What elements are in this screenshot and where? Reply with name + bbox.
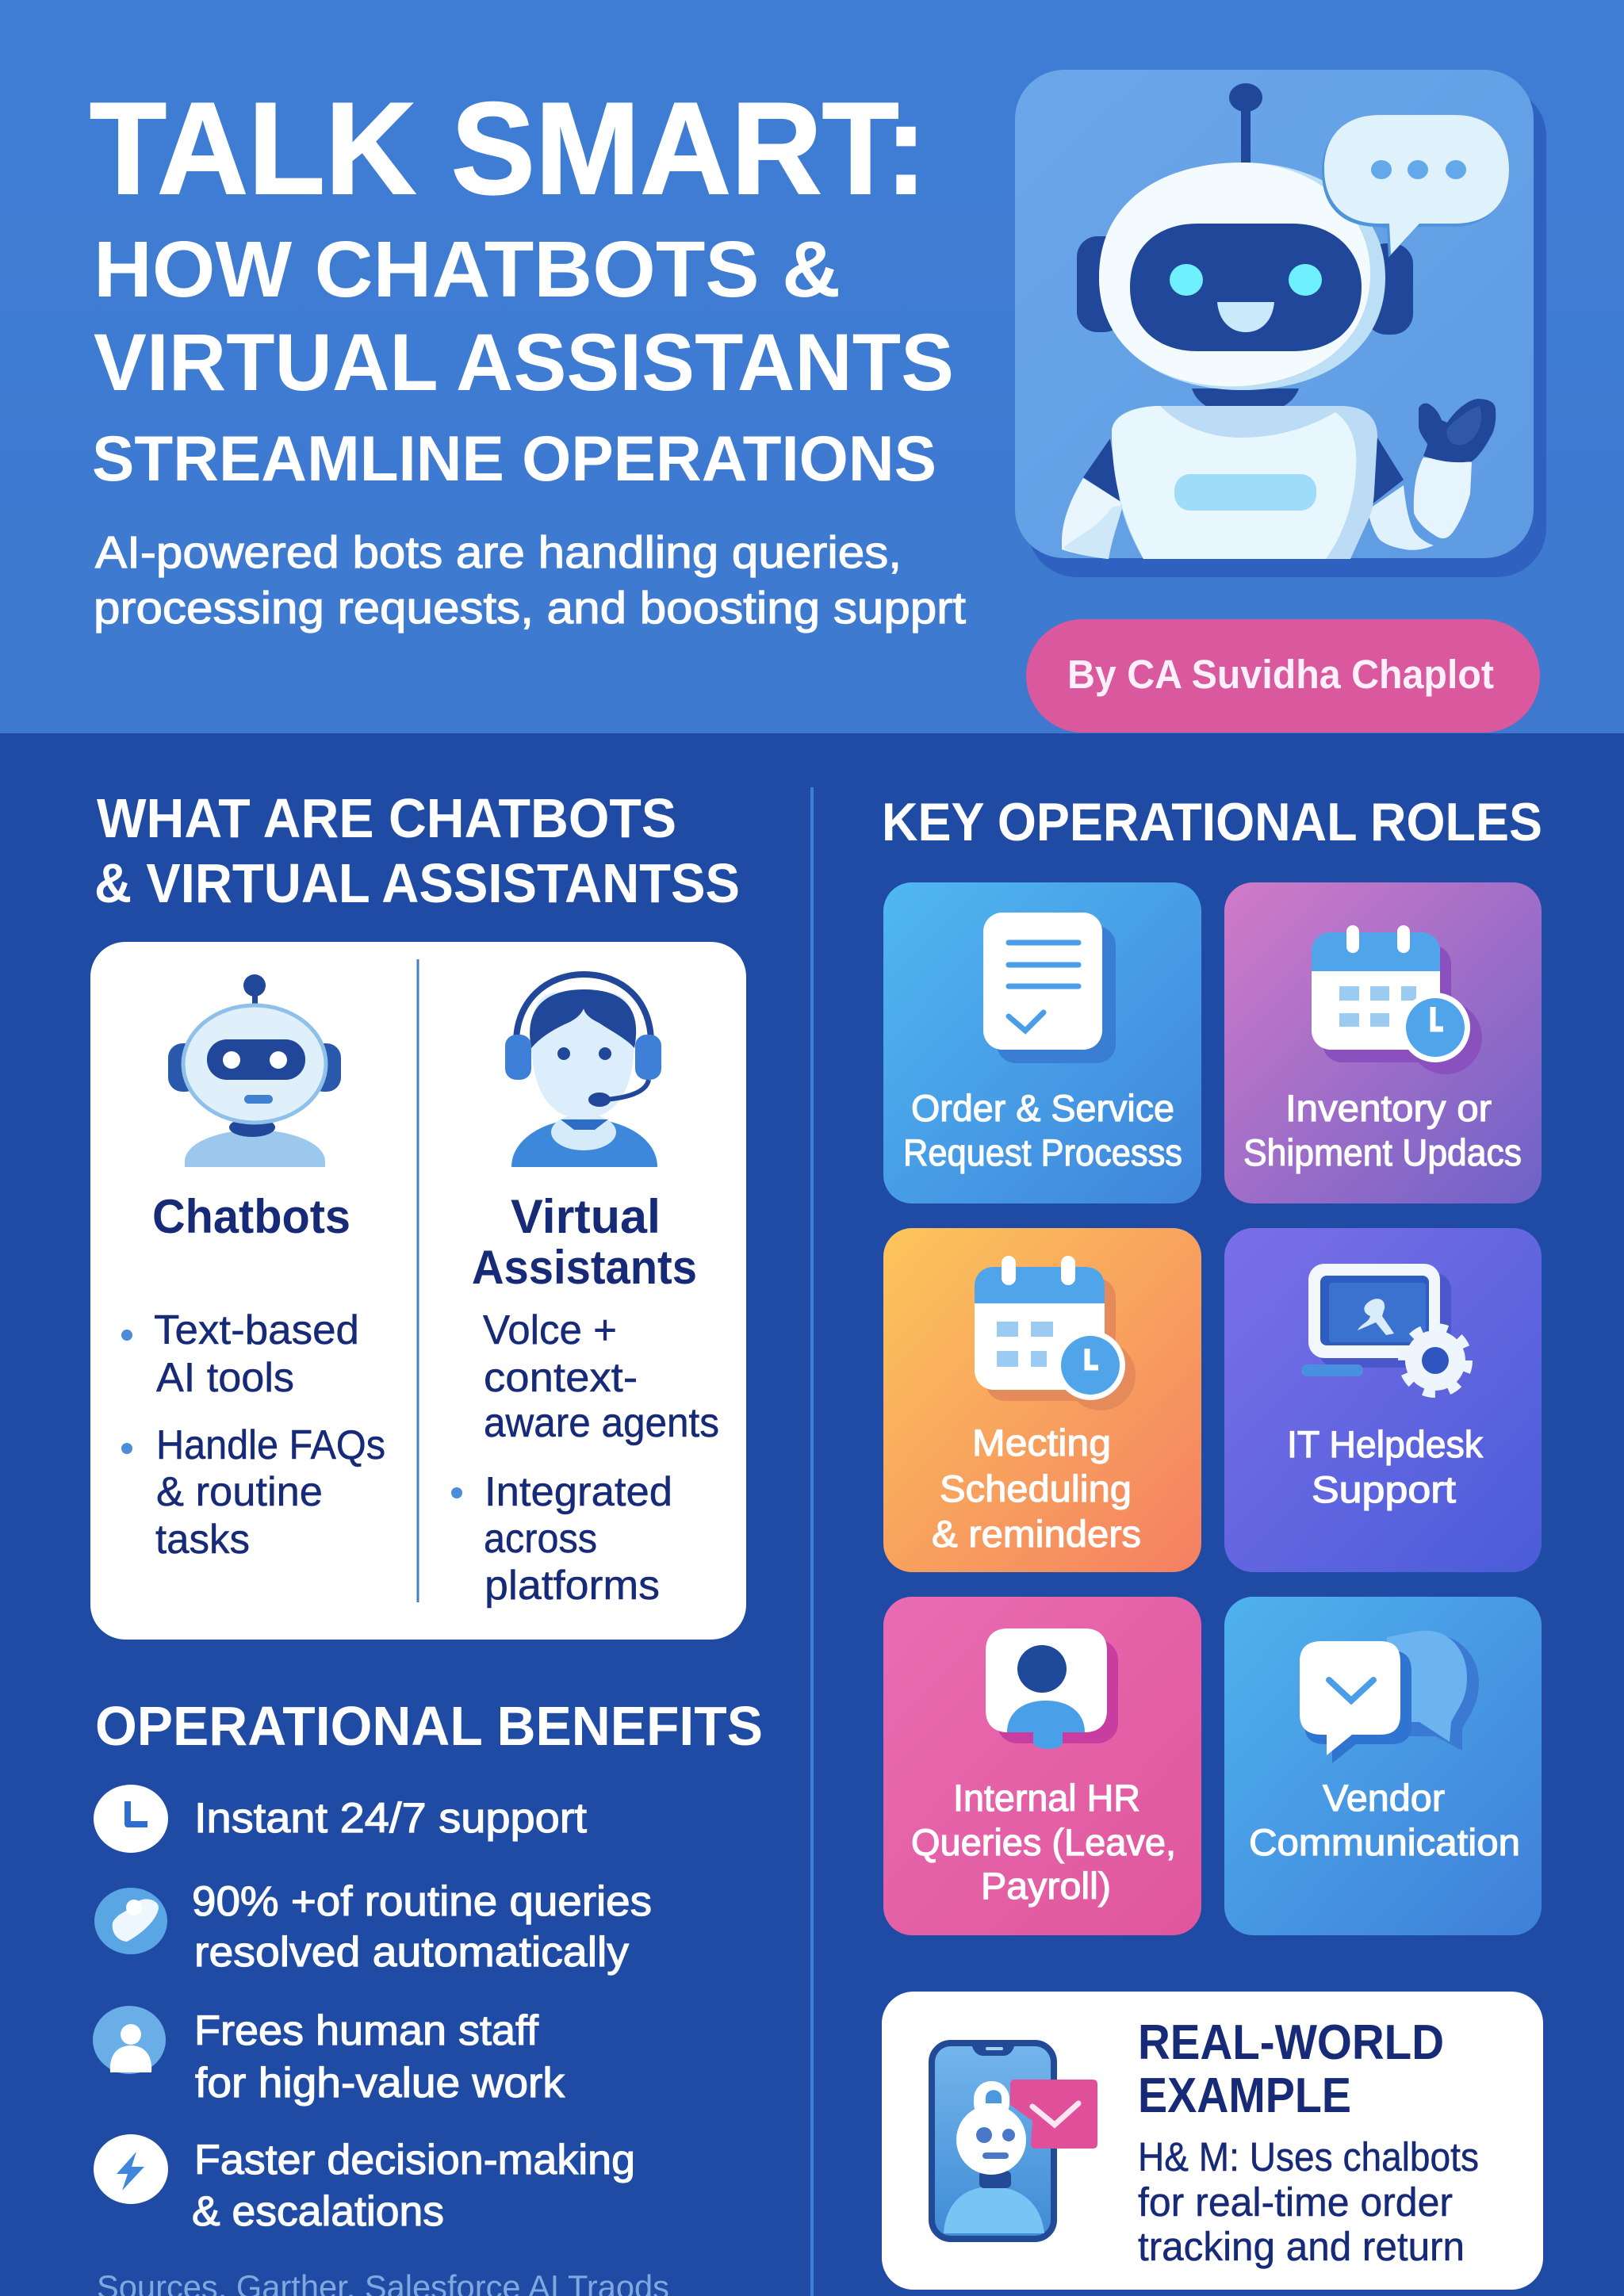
- card: inventory or shipment: Shipment Updacs: [1243, 1131, 1522, 1173]
- benefit: routine queries: 90% +of routine queries: [192, 1878, 652, 1925]
- card: meeting scheduling: Scheduling: [940, 1468, 1132, 1510]
- section heading: what are chatbots: [94, 787, 740, 914]
- robot ears: [1077, 236, 1413, 335]
- card: meeting scheduling: & reminders: [932, 1513, 1141, 1555]
- title: VIRTUAL ASSISTANTS: [94, 317, 954, 408]
- title: HOW CHATBOTS &: [94, 225, 841, 314]
- benefit: frees human staff: for high-value work: [195, 2060, 565, 2107]
- robot eyes: [1170, 264, 1322, 296]
- icon: person profile: [986, 1628, 1118, 1749]
- virtual assistants column text: Assistants: [472, 1241, 697, 1294]
- header band: [0, 0, 1624, 733]
- card: vendor communication: Communication: [1249, 1821, 1520, 1863]
- antenna: [1229, 83, 1262, 166]
- section heading: key operational roles: KEY OPERATIONAL ROLES: [882, 792, 1542, 852]
- icon: chat bubbles: [1300, 1631, 1479, 1763]
- card: inventory or shipment: Inventory or: [1285, 1087, 1492, 1129]
- robot smile: [1217, 302, 1274, 332]
- panel: real-world example: tracking and return: [1138, 2224, 1465, 2269]
- icon: monitor and gear: [1301, 1264, 1468, 1393]
- virtual assistants column text: aware agents: [484, 1400, 719, 1446]
- title: [90, 75, 954, 495]
- speech bubble: [1322, 115, 1509, 258]
- icon: calendar with clock: [1312, 925, 1482, 1074]
- robot arms: [1062, 399, 1496, 559]
- message badge: [1010, 2080, 1097, 2149]
- card: internal HR queries: Payroll): [981, 1865, 1111, 1907]
- chatbots column text: [121, 1190, 385, 1563]
- virtual assistants column text: [451, 1190, 719, 1609]
- subtitle: [94, 527, 966, 633]
- robot head: [1099, 163, 1385, 390]
- benefit: instant support: [94, 1785, 587, 1853]
- card: vendor communication: [1224, 1597, 1542, 1935]
- panel: chatbots vs virtual assistants: [90, 942, 746, 1640]
- card: IT helpdesk: IT Helpdesk: [1287, 1423, 1483, 1465]
- subtitle: AI-powered bots are handling queries,: [95, 527, 902, 578]
- subtitle: processing requests, and boosting supprt: [94, 583, 966, 633]
- author pill: By CA Suvidha Chaplot: [1067, 652, 1494, 697]
- benefit: faster decisions: & escalations: [192, 2188, 444, 2235]
- author pill: [1026, 619, 1540, 733]
- section heading: what are chatbots: WHAT ARE CHATBOTS: [97, 787, 676, 849]
- benefit: routine queries: resolved automatically: [194, 1929, 630, 1976]
- benefit: faster decisions: [94, 2134, 635, 2235]
- title: STREAMLINE OPERATIONS: [92, 423, 936, 495]
- panel: real-world example: EXAMPLE: [1138, 2068, 1351, 2123]
- card: internal HR queries: [883, 1597, 1201, 1935]
- card: IT helpdesk: [1224, 1228, 1542, 1572]
- virtual assistants column text: Volce +: [483, 1307, 617, 1353]
- virtual assistants column text: Virtual: [511, 1190, 661, 1243]
- title: TALK SMART:: [90, 75, 927, 221]
- card: meeting scheduling: Mecting: [972, 1422, 1111, 1464]
- card: internal HR queries: Queries (Leave,: [911, 1821, 1176, 1863]
- section heading: what are chatbots: & VIRTUAL ASSISTANTSS: [94, 852, 740, 914]
- card: order and service: [883, 882, 1201, 1203]
- benefit: frees human staff: [93, 2006, 565, 2107]
- robot neck: [1192, 388, 1299, 415]
- icon: phone with bot: [932, 2043, 1097, 2239]
- benefit: routine queries: [94, 1878, 652, 1976]
- benefit: instant support: Instant 24/7 support: [194, 1795, 587, 1842]
- panel: real-world example: [882, 1992, 1543, 2290]
- card: vendor communication: Vendor: [1323, 1777, 1445, 1819]
- panel: real-world example: REAL-WORLD: [1138, 2015, 1444, 2070]
- virtual assistants column text: across: [484, 1516, 597, 1562]
- chest display: [1174, 474, 1316, 511]
- panel: real-world example: H& M: Uses chalbots: [1138, 2134, 1479, 2179]
- virtual assistants column text: platforms: [485, 1563, 660, 1609]
- card: order and service: Order & Service: [911, 1087, 1174, 1129]
- card: inventory or shipment: [1224, 882, 1542, 1203]
- icon: document: [983, 913, 1116, 1063]
- chatbots column text: Handle FAQs: [156, 1422, 385, 1468]
- virtual assistants column text: context-: [484, 1355, 638, 1401]
- benefit: frees human staff: Frees human staff: [194, 2007, 538, 2054]
- robot face visor: [1130, 224, 1362, 351]
- robot body: [1112, 406, 1377, 559]
- chatbots column text: tasks: [155, 1517, 250, 1563]
- chatbots column text: AI tools: [156, 1355, 294, 1401]
- robot illustration panel: [1015, 70, 1546, 577]
- section heading: operational benefits: OPERATIONAL BENEFITS: [95, 1695, 763, 1757]
- panel: real-world example: for real-time order: [1138, 2179, 1453, 2225]
- card: meeting scheduling: [883, 1228, 1201, 1572]
- card: IT helpdesk: Support: [1312, 1468, 1456, 1510]
- icon: calendar with clock: [975, 1256, 1136, 1410]
- chatbots column text: Text-based: [154, 1307, 359, 1353]
- virtual assistants column text: Integrated: [485, 1469, 672, 1515]
- card: order and service: Request Processs: [903, 1131, 1182, 1173]
- benefit: faster decisions: Faster decision-making: [194, 2137, 635, 2183]
- chatbots column text: Chatbots: [152, 1190, 350, 1243]
- column divider: [810, 787, 814, 2296]
- card: internal HR queries: Internal HR: [953, 1777, 1140, 1819]
- icon: virtual assistant: [505, 974, 661, 1167]
- icon: chatbot: [168, 974, 341, 1167]
- chatbots column text: & routine: [156, 1469, 323, 1515]
